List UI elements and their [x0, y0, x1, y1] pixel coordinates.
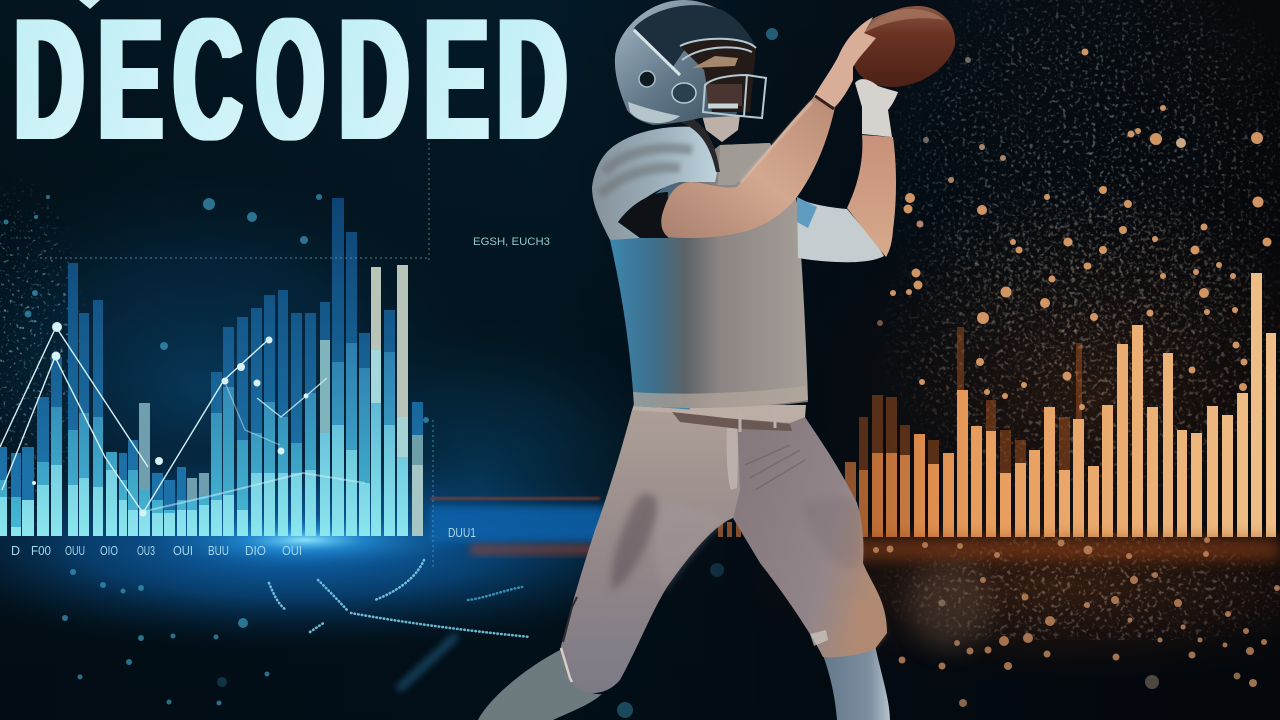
- quarterback figure: [478, 0, 955, 720]
- bar chart: orange: [718, 273, 1276, 537]
- chart labels: x axis: BUU: [208, 544, 229, 558]
- orange bars: main layer: [845, 273, 1276, 537]
- lens flare near player: [908, 560, 992, 650]
- support hand glove: [855, 79, 898, 137]
- orange baseline glow: [780, 538, 1280, 560]
- small stub bars behind player: [718, 522, 741, 537]
- sleeve stripes: [600, 148, 692, 195]
- right leg: [733, 412, 887, 657]
- helmet crown shadow: [634, 5, 755, 68]
- particle field: orange: [880, 170, 1280, 640]
- support forearm: [847, 135, 896, 257]
- blue bars: middle layer: [0, 340, 423, 536]
- helmet ear hole: [639, 71, 655, 87]
- title: [14, 0, 567, 175]
- left leg: [560, 410, 740, 693]
- chart labels: x axis: DIO: [245, 544, 266, 558]
- face opening: [680, 39, 756, 112]
- chart labels: x axis: D: [11, 544, 20, 558]
- throwing arm: [661, 98, 835, 238]
- trouser shading and knee panel: [561, 404, 885, 682]
- face mask: [634, 30, 766, 118]
- chart labels: x axis: OUU: [65, 544, 85, 558]
- jersey chest: [718, 143, 770, 185]
- left calf: [478, 650, 602, 720]
- lower face: [706, 84, 742, 106]
- chart labels: x axis: F00: [31, 544, 51, 558]
- chart labels: value: DUU1: [448, 525, 476, 540]
- throwing hand: [813, 17, 876, 107]
- arm highlight: [740, 102, 812, 182]
- right shin: [823, 645, 890, 720]
- helmet side logo: [672, 83, 696, 103]
- chart labels: x axis: OUI: [173, 544, 193, 558]
- armpit shadow: [618, 192, 668, 238]
- particle field: blue: [0, 178, 84, 534]
- chart labels: x axis: OUI: [282, 544, 302, 558]
- jersey hem: [633, 386, 808, 408]
- orange particles: lower: [873, 537, 1280, 707]
- helmet rear pad: [628, 102, 680, 123]
- neck: [702, 115, 740, 142]
- jersey left sleeve: [592, 127, 717, 240]
- wristband: [815, 96, 834, 109]
- orange bars: faint upper layer: [859, 327, 1082, 537]
- football: [853, 6, 955, 87]
- bar chart: blue: [0, 198, 423, 536]
- support upper arm sleeve: [797, 197, 884, 262]
- chart labels: x axis: OIO: [100, 544, 118, 558]
- sleeve blue edge: [797, 197, 817, 228]
- helmet shell: [615, 0, 755, 125]
- particle trail: [269, 560, 530, 637]
- chart reference lines (dotted): [40, 143, 433, 570]
- line chart markers: [32, 322, 308, 516]
- floor light band: blue: [0, 440, 710, 650]
- collar: [680, 116, 720, 172]
- icon: clipped top mark: [79, 0, 100, 9]
- blurred streak: [400, 637, 455, 688]
- line chart overlay: [0, 327, 365, 513]
- particle cloud: dark teal: [880, 0, 1280, 400]
- blue particles: [4, 28, 778, 718]
- orange particles: upper: [877, 48, 1272, 410]
- jersey torso: [610, 143, 808, 408]
- chart labels: title: EGSH, EUCH3: [473, 236, 550, 248]
- chart labels: x axis: OU3: [137, 544, 155, 558]
- blue bars: light layer: [0, 403, 423, 536]
- football highlight: [862, 9, 945, 34]
- blue bars: dark layer: [0, 198, 423, 536]
- face highlight: [692, 56, 738, 68]
- chart labels: x axis: [11, 544, 302, 558]
